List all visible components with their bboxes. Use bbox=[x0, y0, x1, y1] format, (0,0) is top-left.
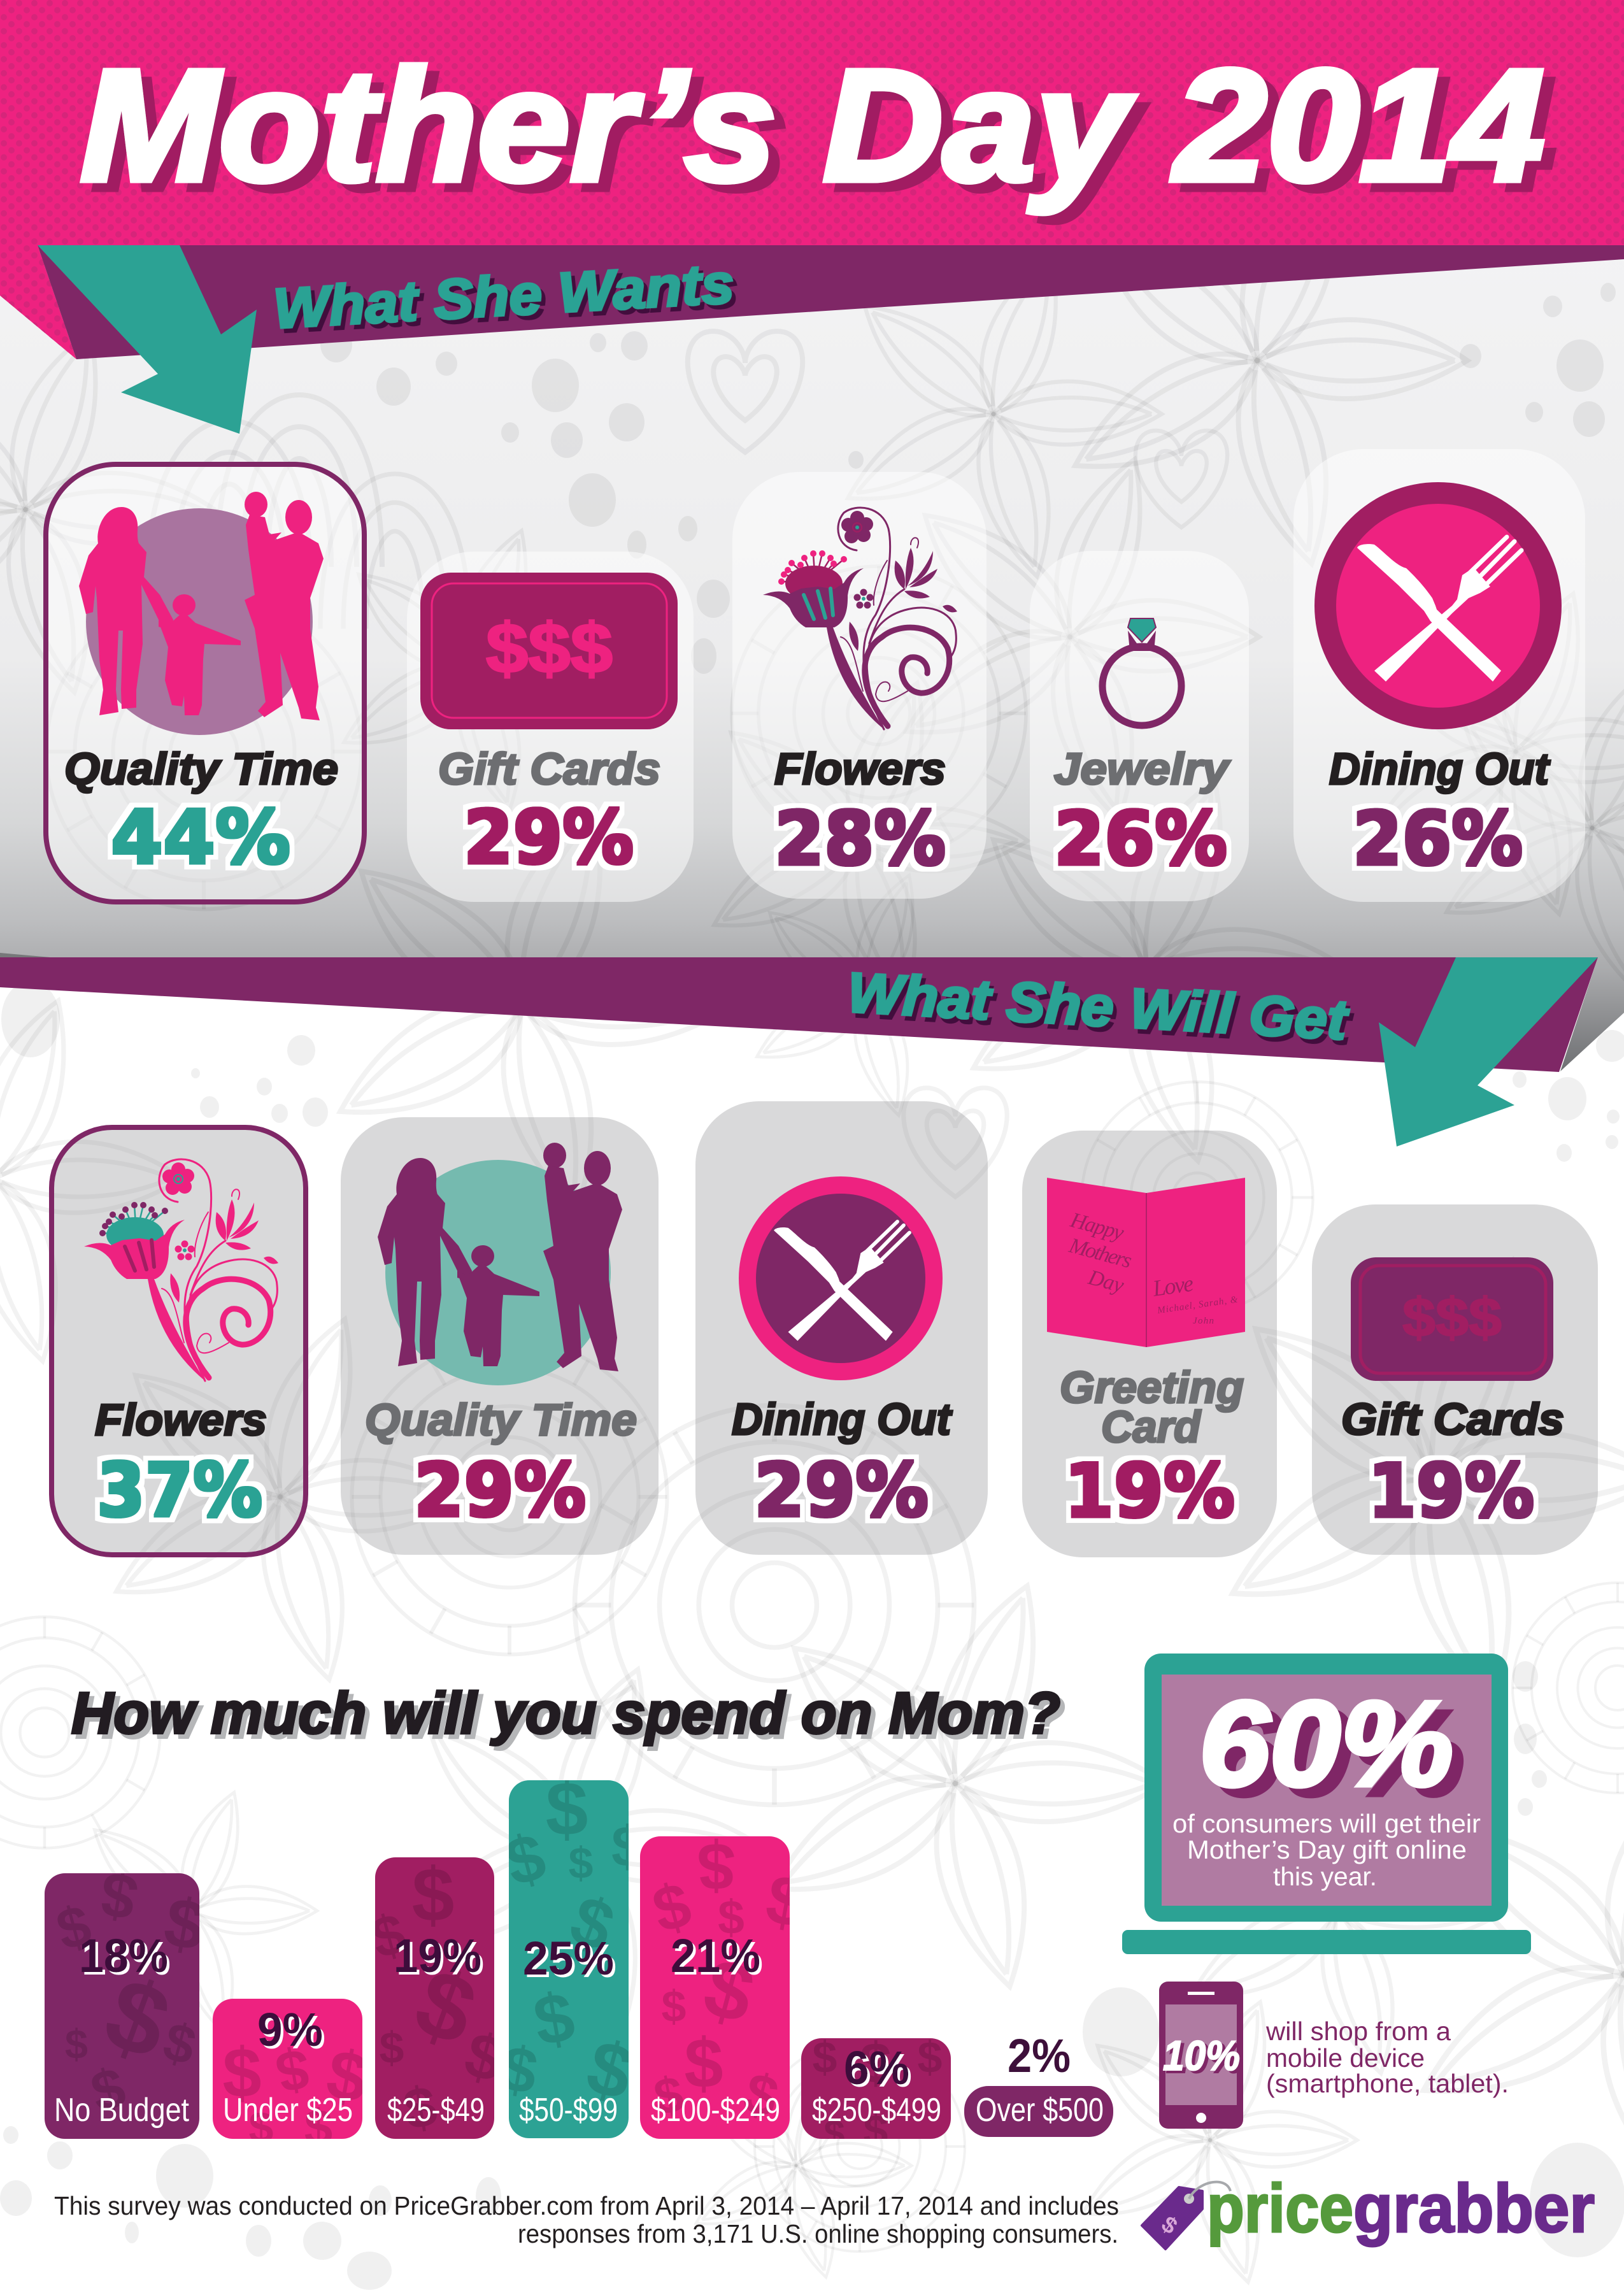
bar: $100-$249 21%: $ bbox=[662, 1982, 686, 2031]
value: 29% bbox=[414, 1448, 586, 1534]
bar: under $25 9% bbox=[213, 1999, 362, 2139]
bar: $100-$249 21%: $ bbox=[650, 2065, 688, 2126]
footer note: responses from 3,171 U.S. online shopping consumers. bbox=[518, 2219, 1118, 2248]
heading: how much will you spend: How much will you spend on Mom? bbox=[71, 1681, 1060, 1746]
value: 44% bbox=[111, 795, 290, 881]
arrow: what she will get bbox=[1379, 957, 1598, 1146]
panel: dining out 29% bbox=[695, 1101, 988, 1555]
bar: over $500 2%: Over $500 bbox=[976, 2092, 1104, 2129]
bar: no budget 18%: 18% bbox=[79, 1929, 168, 1982]
text: of consumers will get their bbox=[1172, 1809, 1481, 1838]
label: Greeting bbox=[1060, 1362, 1244, 1412]
bar: under $25 9%: 9% bbox=[257, 2003, 323, 2056]
bar: no budget 18%: $ bbox=[65, 2020, 88, 2068]
icon: greeting card: Love bbox=[1151, 1270, 1195, 1301]
bar: $250-$499 6%: $250-$499 bbox=[812, 2092, 941, 2129]
bar: $25-$49 19%: 19% bbox=[394, 1929, 481, 1982]
bar: $50-$99 25%: $ bbox=[560, 1880, 624, 1967]
bar: under $25 9%: Under $25 bbox=[223, 2092, 353, 2129]
bar: $50-$99 25% bbox=[509, 1780, 629, 2138]
value: 29% bbox=[754, 1448, 929, 1534]
text bbox=[1172, 1809, 1481, 1891]
bar: $250-$499 6% bbox=[801, 2038, 951, 2139]
header left corner fold bbox=[0, 245, 76, 359]
icon: greeting card: Day bbox=[1085, 1266, 1127, 1297]
bar: no budget 18% bbox=[45, 1873, 199, 2139]
bar: $50-$99 25%: $ bbox=[578, 2024, 642, 2117]
bar: $50-$99 25%: $ bbox=[546, 1766, 588, 1852]
panel: quality time 44% bbox=[46, 464, 364, 902]
bar: $100-$249 21%: $ bbox=[737, 2061, 785, 2131]
logo: pricegrabber: price bbox=[1207, 2169, 1353, 2247]
callout: phone 10% bbox=[1159, 1982, 1509, 2129]
bar: $250-$499 6%: $ bbox=[864, 2106, 888, 2155]
band: what she wants bbox=[38, 245, 1624, 359]
bar: $100-$249 21%: $100-$249 bbox=[651, 2092, 780, 2129]
decorative sliver bbox=[0, 953, 50, 957]
icon: family bbox=[378, 1143, 622, 1385]
bar: $100-$249 21% bbox=[640, 1836, 790, 2139]
panel: dining out 26% bbox=[1293, 449, 1585, 902]
icon: family bbox=[79, 492, 324, 735]
icon: price tag: $ bbox=[1157, 2210, 1182, 2239]
label: Dining Out bbox=[1329, 744, 1551, 794]
panel: quality time 29% bbox=[341, 1117, 659, 1555]
callout: laptop 60% bbox=[1122, 1654, 1531, 1954]
header dot pattern bbox=[0, 0, 1624, 245]
icon: greeting card bbox=[1047, 1178, 1245, 1347]
bar: $25-$49 19%: $ bbox=[458, 2018, 510, 2096]
value: 26% bbox=[1054, 796, 1227, 882]
icon: flower bbox=[763, 508, 957, 729]
label: Gift Cards bbox=[1341, 1394, 1564, 1444]
icon: greeting card: Mothers bbox=[1066, 1234, 1134, 1273]
bar: under $25 9%: $ bbox=[321, 2034, 373, 2118]
panel: flowers 37% bbox=[52, 1127, 306, 1555]
bar: no budget 18%: $ bbox=[159, 1882, 211, 1966]
label: Quality Time bbox=[365, 1395, 637, 1445]
text: this year. bbox=[1273, 1862, 1377, 1891]
heading: what she will get: What She Will Get bbox=[846, 961, 1351, 1052]
label: Gift Cards bbox=[438, 744, 660, 794]
icon: gift card bbox=[1351, 1257, 1553, 1381]
icon: greeting card: John bbox=[1193, 1316, 1214, 1326]
bar: $25-$49 19% bbox=[375, 1857, 494, 2139]
bar: $50-$99 25%: $ bbox=[569, 1838, 593, 1888]
label: Jewelry bbox=[1054, 744, 1230, 794]
bar: $25-$49 19%: $ bbox=[399, 2074, 441, 2143]
bar: $250-$499 6%: $ bbox=[860, 2032, 892, 2096]
icon: ring bbox=[1102, 618, 1181, 725]
bar: under $25 9%: $ bbox=[222, 2034, 262, 2112]
bar: $100-$249 21%: $ bbox=[646, 1869, 698, 1947]
bar: $50-$99 25%: $ bbox=[495, 2032, 543, 2108]
bar: no budget 18%: $ bbox=[85, 2055, 132, 2125]
icon: greeting card: Happy bbox=[1067, 1208, 1127, 1245]
bar: $50-$99 25%: $ bbox=[528, 1977, 580, 2061]
label: Dining Out bbox=[732, 1394, 953, 1444]
text: will shop from a bbox=[1265, 2017, 1451, 2046]
footer note: This survey was conducted on PriceGrabber.com from April 3, 2014 – April 17, 2014 and includes bbox=[54, 2191, 1119, 2220]
icon: gift card bbox=[420, 573, 678, 729]
bar: $100-$249 21%: $ bbox=[698, 1829, 735, 1903]
panel: jewelry 26% bbox=[1030, 551, 1249, 901]
bar: $25-$49 19%: $25-$49 bbox=[387, 2092, 485, 2129]
bar: no budget 18%: $ bbox=[96, 1857, 143, 1934]
panel: gift cards 19% bbox=[1312, 1204, 1598, 1555]
bar: over $500 2%: 2% bbox=[1008, 2029, 1071, 2082]
bar: $25-$49 19%: $ bbox=[402, 1947, 489, 2066]
bar: $25-$49 19%: $ bbox=[365, 1901, 412, 1971]
value: 10% bbox=[1163, 2032, 1240, 2079]
heading: what she wants: What She Wants bbox=[272, 252, 736, 340]
bar: $25-$49 19%: $ bbox=[380, 2023, 404, 2073]
text: Mother’s Day gift online bbox=[1187, 1835, 1467, 1864]
bar: under $25 9%: $ bbox=[304, 2099, 332, 2155]
value: 37% bbox=[97, 1448, 262, 1534]
panel: gift cards 29% bbox=[407, 552, 694, 902]
text: mobile device bbox=[1266, 2043, 1425, 2073]
icon: gift card: $$$ bbox=[486, 610, 613, 688]
icon: greeting card: Michael, Sarah, & bbox=[1156, 1294, 1239, 1316]
label bbox=[1060, 1362, 1244, 1452]
band: what she will get bbox=[0, 957, 1598, 1072]
bar: $250-$499 6%: $ bbox=[823, 2112, 845, 2155]
bar: over $500 2% bbox=[964, 2029, 1113, 2137]
bar: $50-$99 25%: $ bbox=[498, 1819, 553, 1901]
bar: under $25 9%: $ bbox=[272, 2036, 314, 2104]
value: 60% bbox=[1199, 1676, 1453, 1811]
bar: $100-$249 21%: 21% bbox=[671, 1929, 760, 1982]
icon: plate bbox=[1314, 482, 1562, 729]
value: 29% bbox=[464, 795, 634, 881]
bar chart: spending bbox=[45, 1766, 1113, 2155]
icon: price tag bbox=[1142, 2182, 1230, 2249]
bar: $100-$249 21%: $ bbox=[684, 2024, 723, 2103]
bar: no budget 18%: $ bbox=[92, 1955, 183, 2081]
grey gradient section background bbox=[0, 245, 1624, 1071]
value: 26% bbox=[1353, 796, 1523, 882]
bar: $250-$499 6%: 6% bbox=[844, 2041, 909, 2094]
text: (smartphone, tablet). bbox=[1266, 2069, 1509, 2098]
value: 28% bbox=[774, 796, 946, 882]
bar: $50-$99 25%: 25% bbox=[523, 1932, 614, 1985]
header banner bbox=[0, 0, 1624, 245]
label: Flowers bbox=[95, 1395, 267, 1445]
arrow: what she wants bbox=[38, 245, 257, 434]
bar: $100-$249 21%: $ bbox=[695, 1939, 764, 2041]
bar: $250-$499 6%: $ bbox=[918, 2032, 942, 2082]
bar: under $25 9%: $ bbox=[249, 2103, 273, 2152]
footer note bbox=[54, 2191, 1119, 2248]
title: Mother’s Day 2014 bbox=[80, 36, 1544, 214]
text bbox=[1265, 2017, 1509, 2098]
bar: $25-$49 19%: $ bbox=[412, 1852, 454, 1938]
bar: no budget 18%: No Budget bbox=[54, 2092, 189, 2129]
bar: $100-$249 21%: $ bbox=[760, 1859, 813, 1943]
bar: no budget 18%: $ bbox=[157, 2011, 202, 2077]
bar: $50-$99 25%: $ bbox=[611, 1815, 643, 1879]
label: Quality Time bbox=[64, 744, 338, 794]
icon: flower bbox=[84, 1159, 278, 1381]
icon: gift card: $$$ bbox=[1402, 1287, 1502, 1348]
bar: $100-$249 21%: $ bbox=[718, 1890, 744, 1944]
panel: greeting card 19% bbox=[1022, 1131, 1277, 1557]
bar: no budget 18%: $ bbox=[50, 1893, 97, 1963]
bar: $50-$99 25%: $50-$99 bbox=[519, 2092, 618, 2129]
panel: flowers 28% bbox=[732, 472, 987, 899]
label: Flowers bbox=[774, 744, 946, 794]
bar: $250-$499 6%: $ bbox=[813, 2032, 837, 2082]
label: Card bbox=[1101, 1402, 1201, 1452]
value: 19% bbox=[1064, 1448, 1235, 1534]
logo: pricegrabber: grabber bbox=[1353, 2169, 1595, 2247]
value: 19% bbox=[1368, 1448, 1534, 1534]
logo: pricegrabber bbox=[1142, 2169, 1595, 2249]
icon: plate bbox=[739, 1176, 943, 1380]
